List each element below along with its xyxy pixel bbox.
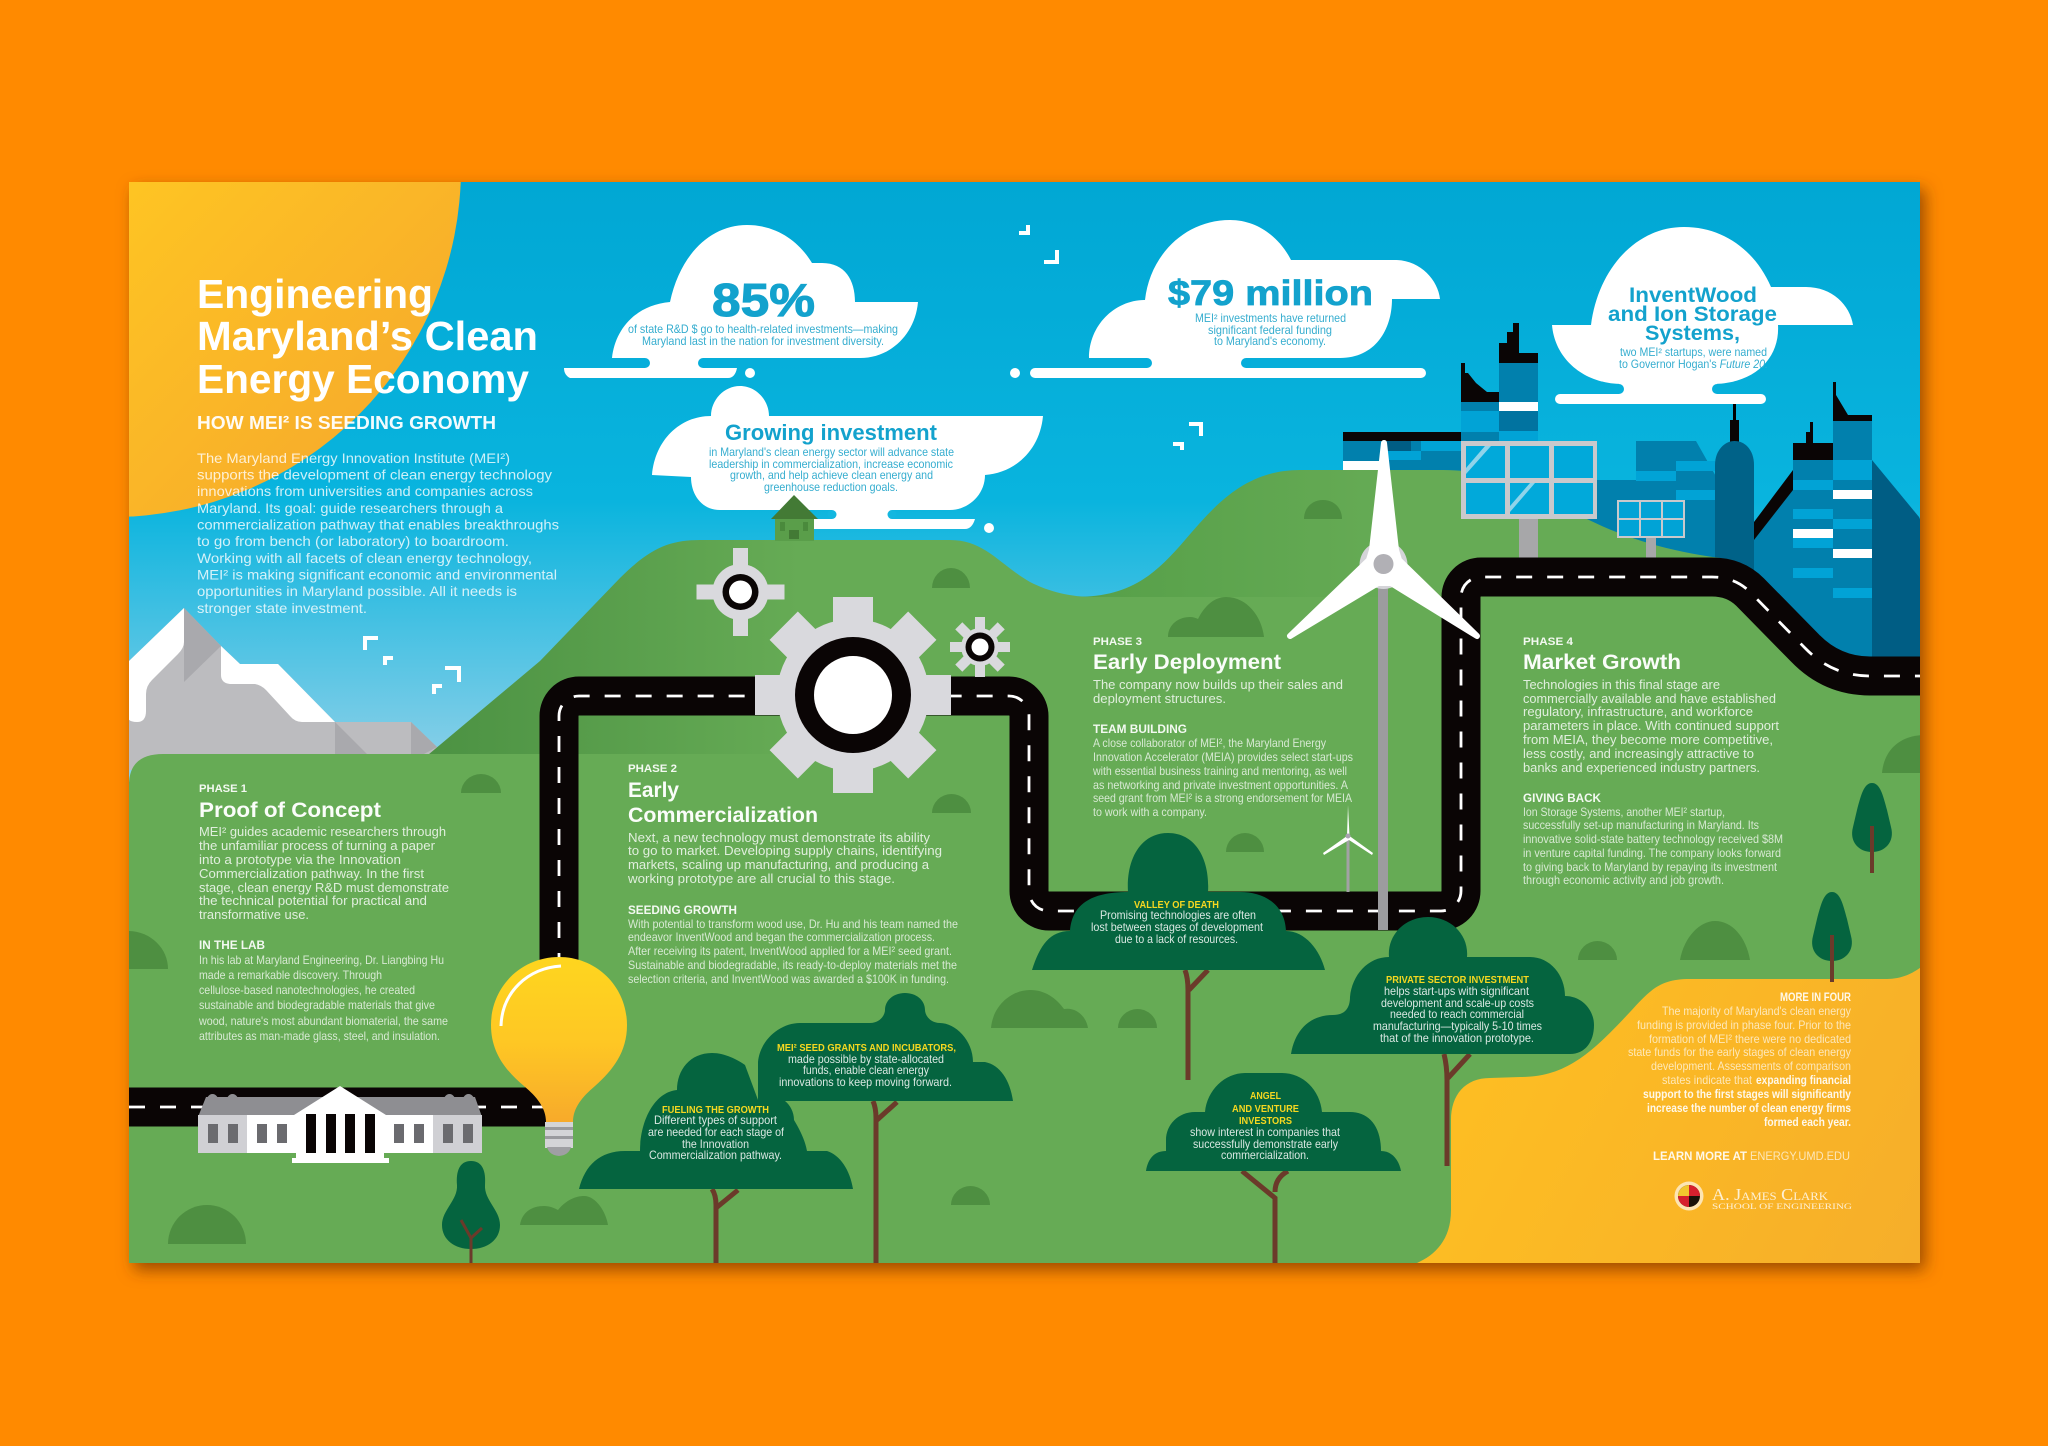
gold corner panel [1417,964,1925,1263]
panel: phase 1: attributes as man-made glass, steel, and insulation. [199,1029,440,1043]
intro text: innovations from universities and companies across [197,483,533,499]
panel: phase 1: In his lab at Maryland Engineering, Dr. Liangbing Hu [199,953,444,967]
panel: phase 2: PHASE 2 [628,763,677,775]
panel: phase 3: TEAM BUILDING [1093,724,1187,736]
panel: phase 4 [1523,636,1783,887]
callout: fueling the growth: the Innovation [682,1138,749,1151]
cloud: InventWood: Systems, [1645,322,1740,345]
callout: valley of death: VALLEY OF DEATH [1134,899,1219,911]
panel: phase 2: Next, a new technology must demonstrate its ability [628,831,931,845]
panel: phase 1: the technical potential for practical and [199,894,427,908]
panel: phase 3: PHASE 3 [1093,636,1142,648]
intro text: to go from bench (or laboratory) to boardroom. [197,533,509,549]
city skyline [1343,323,1925,680]
title: Energy Economy [197,356,529,402]
subtitle: HOW MEI² IS SEEDING GROWTH [197,412,496,433]
panel: phase 2 [627,763,958,986]
callout: valley of death: Promising technologies are often [1100,909,1256,922]
callout: more in four: formation of MEI² there were no dedicated [1649,1032,1851,1046]
callout: fueling the growth: Different types of support [654,1114,778,1127]
learn more link text: LEARN MORE AT [1653,1149,1748,1163]
callout: angel and venture investors: successfully demonstrate early [1193,1138,1338,1151]
icon: small gear [950,617,1010,677]
panel: phase 1: MEI² guides academic researchers through [199,825,446,839]
cloud: Growing investment: leadership in commercialization, increase economic [709,458,953,471]
panel: phase 3: as networking and private investment opportunities. A [1093,778,1348,792]
intro text: MEI² is making significant economic and environmental [197,567,557,583]
callout: private sector investment: manufacturing—typically 5-10 times [1373,1020,1542,1033]
tree trunks [712,970,1470,1263]
panel: phase 2: Sustainable and biodegradable, its ready-to-deploy materials met the [628,958,957,972]
panel: phase 2: After receiving its patent, InventWood applied for a MEI² seed grant. [628,944,952,958]
mountains [128,608,450,770]
callout: more in four [1628,990,1851,1129]
callout: angel and venture investors: commercialization. [1221,1149,1309,1162]
callout: more in four: increase the number of clean energy firms [1647,1101,1851,1115]
panel: phase 3: Early Deployment [1093,651,1281,674]
cloud: Growing investment: greenhouse reduction goals. [764,481,898,494]
panel: phase 4: from MEIA, they become more competitive, [1523,733,1773,747]
panel: infographic poster background [129,182,1920,1263]
callout: more in four: support to the first stages will significantly [1643,1087,1851,1101]
logo: A. James Clark School of Engineering: SCHOOL OF ENGINEERING [1712,1201,1852,1211]
cloud: 85%: of state R&D $ go to health-related investments—making [628,323,898,336]
panel: phase 1: transformative use. [199,908,309,922]
callout: valley of death: due to a lack of resources. [1115,933,1238,946]
far hill: left [429,540,1086,754]
callout: seed grants: made possible by state-allocated [788,1053,944,1066]
panel: phase 2: With potential to transform wood use, Dr. Hu and his team named the [628,917,958,931]
decorative bushes [129,500,1925,1244]
cloud: Growing investment [652,386,1043,533]
scene artwork [129,182,1920,1263]
panel: phase 1: cellulose-based nanotechnologies, he created [199,983,415,997]
intro text: supports the development of clean energy technology [197,467,552,483]
panel: phase 2: selection criteria, and InventWood was awarded a $100K in funding. [628,972,949,986]
logo: A. James Clark School of Engineering [1674,1182,1852,1211]
panel: phase 4: innovative solid-state battery technology received $8M [1523,832,1783,846]
cloud: InventWood: and Ion Storage [1608,303,1777,326]
road [129,577,1930,1107]
panel: phase 4: parameters in place. With continued support [1523,719,1780,733]
panel: phase 1 [198,783,449,1043]
panel: phase 4: in venture capital funding. The company looks forward [1523,846,1781,860]
learn more link text [1653,1149,1850,1163]
callout: more in four: The majority of Maryland's clean energy [1662,1004,1851,1018]
panel: phase 3: Innovation Accelerator (MEIA) provides select start-ups [1093,750,1353,764]
title [197,271,538,402]
icon: large gear [755,597,951,793]
callout: private sector investment: helps start-ups with significant [1384,985,1530,998]
panel: phase 1: sustainable and biodegradable materials that give [199,998,435,1012]
panel: phase 4: Technologies in this final stage are [1523,678,1720,692]
panel: phase 2: endeavor InventWood and began the commercialization process. [628,930,935,944]
panel: phase 4: commercially available and have established [1523,692,1776,706]
title: Maryland’s Clean [197,313,538,359]
sky [129,378,1920,782]
cloud: $79 million: MEI² investments have returned [1195,312,1346,325]
panel: phase 4: through economic activity and job growth. [1523,873,1724,887]
panel: phase 2: SEEDING GROWTH [628,905,737,917]
panel: phase 2: Early [628,779,679,802]
sky markers (birds) [363,225,1203,694]
panel: phase 4: to giving back to Maryland by repaying its investment [1523,860,1778,874]
callout: private sector investment: development and scale-up costs [1381,997,1534,1010]
panel: phase 4: PHASE 4 [1523,636,1574,648]
cloud: InventWood: InventWood [1629,284,1757,307]
panel: phase 1: stage, clean energy R&D must demonstrate [199,881,449,895]
cloud: $79 million: $79 million [1168,274,1373,313]
title: Engineering [197,271,433,317]
callout: valley of death [1091,899,1264,946]
large solar panel [1461,441,1597,559]
callout: angel and venture investors [1190,1090,1341,1162]
logo: A. James Clark School of Engineering: A. James Clark [1712,1185,1828,1204]
icon: house on hill [771,495,818,541]
callout: more in four: MORE IN FOUR [1780,990,1851,1004]
callout: private sector investment: needed to reach commercial [1390,1008,1524,1021]
panel: phase 3: with essential business training and mentoring, as well [1092,764,1347,778]
intro text: Working with all facets of clean energy technology, [197,550,532,566]
panel: phase 1: wood, nature's most abundant biomaterial, the same [198,1014,448,1028]
callout: fueling the growth: FUELING THE GROWTH [662,1104,769,1116]
panel: phase 1: IN THE LAB [199,940,265,952]
main green ground [129,577,1925,1263]
panel: phase 3: deployment structures. [1093,692,1226,706]
lightbulb icon [491,957,627,1156]
cloud: $79 million [1010,220,1440,378]
learn more link text: ENERGY.UMD.EDU [1750,1149,1850,1163]
panel: phase 2: markets, scaling up manufacturing, and producing a [628,858,929,872]
callout: private sector investment: PRIVATE SECTOR INVESTMENT [1386,974,1530,986]
callout: more in four: development. Assessments of comparison [1651,1059,1851,1073]
intro text: stronger state investment. [197,600,367,616]
callout: seed grants [777,1042,956,1089]
cloud: InventWood [1552,227,1853,404]
panel: phase 4: regulatory, infrastructure, and workforce [1523,705,1753,719]
callout: angel and venture investors: AND VENTURE [1232,1103,1299,1115]
panel: phase 1: the unfamiliar process of turning a paper [199,839,435,853]
callout: seed grants: funds, enable clean energy [803,1064,929,1077]
panel: phase 3 [1092,636,1353,819]
far hill: right [1082,470,1720,597]
panel: phase 3: The company now builds up their sales and [1093,678,1343,692]
panel: phase 2: to go to market. Developing supply chains, identifying [628,844,942,858]
sun [129,182,461,517]
tree: pear [442,1161,500,1263]
callout: angel and venture investors: INVESTORS [1239,1115,1292,1127]
callout: more in four: funding is provided in phase four. Prior to the [1637,1018,1851,1032]
panel: phase 1: into a prototype via the Innovation [199,853,401,867]
cloud: 85%: Maryland last in the nation for investment diversity. [642,335,884,348]
icon: large wind turbine [1290,443,1477,930]
intro text: opportunities in Maryland possible. All it needs is [197,583,517,599]
callout: fueling the growth: are needed for each stage of [648,1126,785,1139]
intro text: commercialization pathway that enables breakthroughs [197,517,559,533]
panel: phase 2: Commercialization [628,804,818,827]
cloud: Growing investment: growth, and help achieve clean energy and [730,469,933,482]
callout: angel and venture investors: show interest in companies that [1190,1126,1341,1139]
panel: phase 4: successfully set-up manufacturing in Maryland. Its [1523,818,1759,832]
callout: private sector investment [1373,974,1542,1045]
panel: phase 4: banks and experienced industry partners. [1523,761,1760,775]
icon: small wind turbine [1323,805,1373,892]
cloud: 85% [564,225,918,378]
panel: phase 4: less costly, and increasingly attractive to [1523,747,1754,761]
callout: seed grants: innovations to keep moving forward. [779,1076,952,1089]
cloud: Growing investment: Growing investment [725,420,938,445]
cloud: Growing investment: in Maryland's clean energy sector will advance state [709,446,954,459]
tree canopies [579,833,1594,1189]
callout: more in four: states indicate that [1662,1073,1753,1087]
callout: fueling the growth: Commercialization pathway. [649,1149,782,1162]
panel: phase 1: PHASE 1 [199,783,247,795]
cloud: $79 million: significant federal funding [1208,324,1332,337]
cloud: 85%: 85% [712,274,815,326]
panel: phase 2: working prototype are all crucial to this stage. [627,872,895,886]
callout: valley of death: lost between stages of development [1091,921,1264,934]
callout: more in four: state funds for the early stages of clean energy [1628,1045,1851,1059]
building: university hall [198,1086,482,1163]
cloud: InventWood: two MEI² startups, were named [1620,346,1767,359]
callout: more in four: formed each year. [1764,1115,1851,1129]
panel: phase 1: Proof of Concept [199,799,381,822]
callout: private sector investment: that of the innovation prototype. [1380,1032,1534,1045]
panel: phase 4: Market Growth [1523,651,1681,674]
panel: phase 1: made a remarkable discovery. Through [199,968,382,982]
panel: phase 3: A close collaborator of MEI², the Maryland Energy [1093,736,1326,750]
intro text: The Maryland Energy Innovation Institute (MEI²) [197,450,510,466]
panel: phase 4: Ion Storage Systems, another MEI² startup, [1523,805,1725,819]
panel: phase 3: seed grant from MEI² is a strong endorsement for MEIA [1093,791,1352,805]
callout: seed grants: MEI² SEED GRANTS AND INCUBATORS, [777,1042,956,1054]
intro text [197,450,559,616]
icon: four-tooth gear [696,548,784,636]
small solar panel [1617,500,1685,560]
panel: phase 3: to work with a company. [1093,805,1207,819]
tree: teardrop lower [1812,892,1852,982]
tree: teardrop upper [1852,783,1892,873]
callout: angel and venture investors: ANGEL [1250,1090,1281,1102]
intro text: Maryland. Its goal: guide researchers through a [197,500,503,516]
cloud: $79 million: to Maryland's economy. [1214,335,1326,348]
callout: more in four: expanding financial [1756,1073,1851,1087]
panel: phase 1: Commercialization pathway. In the first [199,867,425,881]
callout: fueling the growth [648,1104,785,1162]
cloud: InventWood: to Governor Hogan's Future 20. [1619,358,1768,371]
panel: phase 4: GIVING BACK [1523,793,1602,805]
